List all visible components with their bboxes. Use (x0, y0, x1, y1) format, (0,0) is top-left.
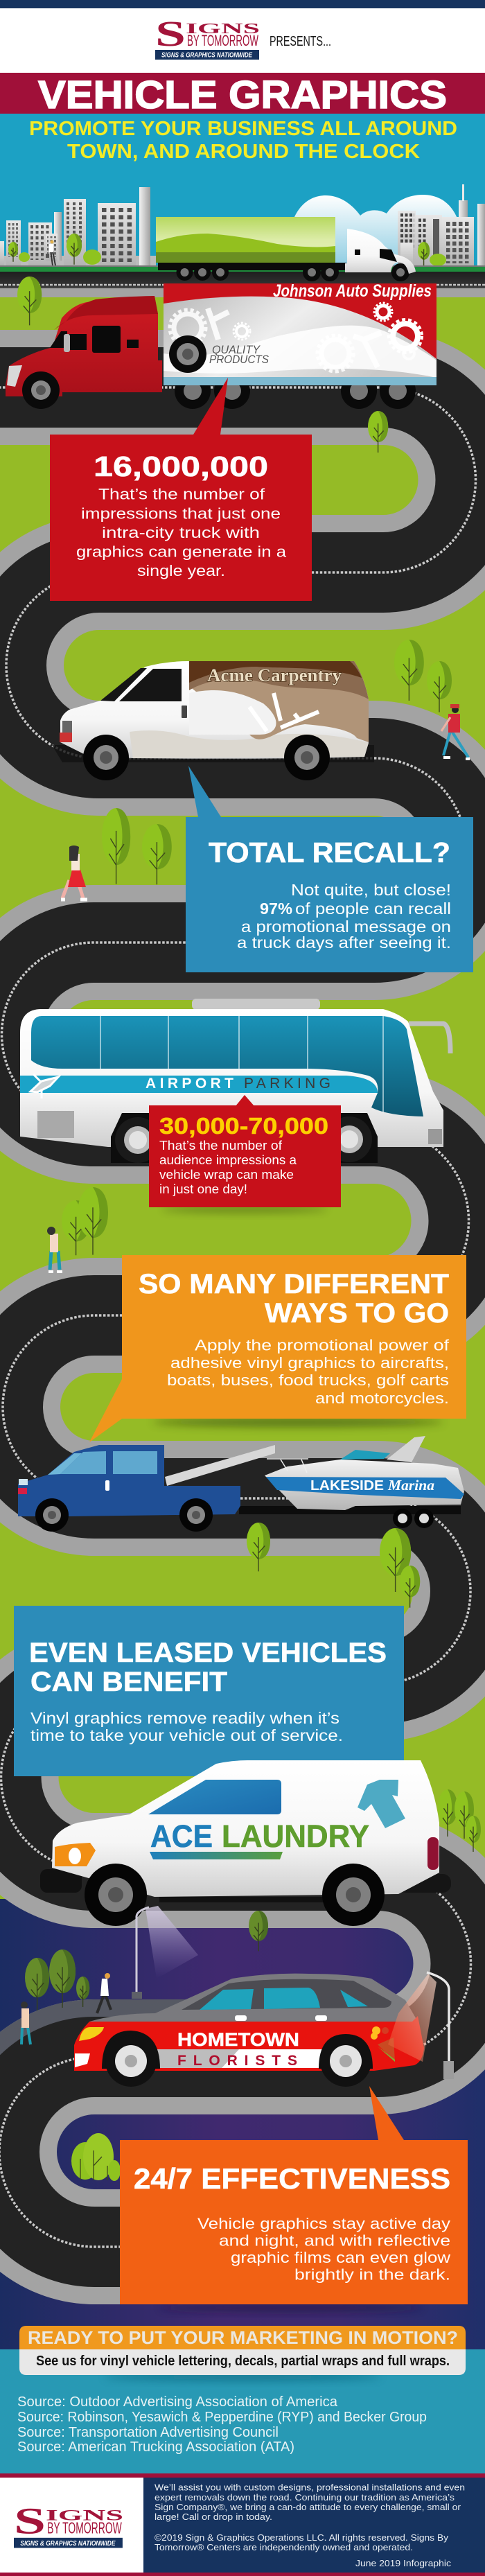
body: Vehicle graphics stay active day (197, 2215, 450, 2232)
t-shirt icon (358, 1780, 405, 1828)
winding road (0, 387, 475, 2247)
callout body (76, 485, 287, 579)
pedestrian with hat (441, 704, 470, 759)
street lamp far (427, 1972, 449, 2062)
red callout: 30,000-70,000 (149, 1095, 341, 1213)
body: time to take your vehicle out of service. (30, 1726, 343, 1744)
body: and night, and with reflective (219, 2232, 450, 2250)
car wheels (102, 2031, 373, 2087)
car body (74, 2016, 424, 2071)
footer text: We’ll assist you with custom designs, professional installations and even (155, 2482, 465, 2492)
pickup wheels (35, 1498, 213, 1532)
body: Vinyl graphics remove readily when it’s (30, 1709, 340, 1727)
logo: Signs By Tomorrow: IGNS (186, 20, 260, 37)
red callout: 16,000,000 (50, 378, 312, 601)
van body (60, 661, 369, 759)
footer logo: IGNS (46, 2507, 123, 2524)
van wrap (189, 661, 369, 742)
red semi truck (6, 281, 436, 409)
heading: WAYS TO GO (265, 1298, 449, 1329)
trees along the road (17, 277, 481, 1852)
car roof (89, 1974, 418, 2022)
body (30, 1709, 343, 1744)
red car: Hometown Florists: FLORISTS (177, 2053, 297, 2069)
presents label: PRESENTS... (270, 34, 331, 49)
van wheels (83, 735, 330, 780)
footer text: June 2019 Infographic (355, 2558, 452, 2568)
night trees (25, 1911, 268, 2010)
bus: Airport Parking (20, 999, 450, 1163)
city skyline left (0, 187, 156, 265)
van windows (100, 668, 182, 701)
trailer frame (239, 1506, 461, 1514)
woman in red skirt (61, 845, 87, 900)
street line and verge (0, 265, 485, 267)
grille (37, 1111, 74, 1138)
body: Apply the promotional power of (195, 1336, 450, 1354)
lights (55, 1843, 96, 1866)
bus lettering: AIRPORT (146, 1076, 233, 1092)
footer logo: BY TOMORROW (47, 2519, 122, 2537)
bouquet (378, 2038, 395, 2062)
night pedestrians (21, 1973, 111, 2044)
red car: Hometown Florists (74, 1972, 454, 2087)
trailer graphic: PRODUCTS (209, 353, 270, 366)
callout body: That’s the number of (98, 485, 265, 503)
tow arm (165, 1445, 275, 1486)
pickup windows (48, 1451, 157, 1475)
call to action heading: READY TO PUT YOUR MARKETING IN MOTION? (28, 2327, 458, 2348)
body: of people can recall (295, 900, 451, 918)
body: and motorcycles. (315, 1390, 449, 1407)
body (197, 2215, 450, 2283)
white van: Ace Laundry: LAUNDRY (222, 1819, 369, 1854)
upper truck wheels (176, 263, 409, 281)
body: Not quite, but close! (291, 881, 451, 899)
body: boats, buses, food trucks, golf carts (167, 1372, 449, 1389)
callout body: single year. (137, 562, 225, 579)
street trees in city (8, 234, 446, 266)
pickup body (18, 1445, 240, 1516)
van body (52, 1760, 439, 1897)
subtitle: TOWN, AND AROUND THE CLOCK (67, 141, 420, 163)
boat: LAKESIDE (310, 1478, 384, 1493)
green trailer (156, 217, 335, 263)
white cab (345, 229, 416, 274)
top navy bar (0, 0, 485, 8)
footer text: Sign Company®, we bring a can-do attitude to every challenge, small or (155, 2502, 461, 2512)
heading: 24/7 EFFECTIVENESS (134, 2162, 450, 2195)
body (159, 1139, 297, 1196)
body: vehicle wrap can make (159, 1168, 294, 1182)
car windows (200, 1988, 368, 2010)
big yellow number: 30,000-70,000 (159, 1113, 328, 1139)
van wrap: Acme Carpentry (207, 665, 342, 685)
truck wheels (175, 373, 416, 409)
truck cab (6, 296, 162, 409)
footer logo (14, 2500, 123, 2548)
city skyline right (398, 184, 485, 265)
trailer graphic (164, 281, 436, 385)
bus stripe (20, 1076, 378, 1093)
boat: Marina (387, 1477, 434, 1493)
bus body (20, 1009, 443, 1147)
trailer wheels (393, 1509, 434, 1528)
pickup truck towing boat (18, 1436, 464, 1532)
lower body wave (130, 730, 369, 758)
clouds (290, 195, 459, 265)
white van: Acme Carpentry (52, 661, 374, 780)
blue callout: leased vehicles (14, 1606, 404, 1776)
orange callout: so many ways (89, 1255, 466, 1442)
mirror (409, 1024, 450, 1053)
body: a promotional message on (241, 918, 451, 936)
trailer graphic: QUALITY (212, 343, 261, 356)
pedestrian in teal jeans (47, 1227, 62, 1272)
grass background (0, 272, 485, 1900)
boat (265, 1436, 464, 1510)
subtitle: PROMOTE YOUR BUSINESS ALL AROUND (29, 118, 457, 140)
plane icon (30, 1074, 58, 1098)
sources list: Source: American Trucking Association (ATA) (17, 2439, 294, 2455)
body: 97% (260, 900, 292, 918)
footer logo: SIGNS & GRAPHICS NATIONWIDE (20, 2540, 116, 2548)
subtitle (29, 118, 457, 163)
heading: EVEN LEASED VEHICLES (29, 1638, 387, 1668)
top road (0, 272, 485, 297)
bus windows (31, 1016, 423, 1116)
night background (0, 1899, 485, 2349)
blue callout: Total Recall (186, 766, 473, 972)
logo: Signs By Tomorrow: S (155, 15, 186, 54)
white van: Ace Laundry (40, 1760, 451, 1926)
car lettering: HOMETOWN (177, 2029, 299, 2050)
footer text: Tomorrow® Centers are independently owned and operated. (155, 2542, 413, 2552)
footer text: ©2019 Sign & Graphics Operations LLC. All rights reserved. Signs By (155, 2532, 449, 2543)
wheels (85, 1864, 385, 1926)
body: adhesive vinyl graphics to aircrafts, (170, 1354, 449, 1372)
body (237, 881, 451, 952)
footer logo: S (14, 2500, 46, 2542)
big number: 16,000,000 (94, 450, 268, 482)
side band (157, 2049, 323, 2068)
callout body: impressions that just one (81, 505, 281, 523)
body: brightly in the dark. (294, 2266, 450, 2283)
callout body: graphics can generate in a (76, 543, 287, 560)
call to action text: See us for vinyl vehicle lettering, decals, partial wraps and full wraps. (36, 2354, 450, 2369)
logo: Signs By Tomorrow: BY TOMORROW (187, 32, 258, 49)
sources list (17, 2394, 427, 2455)
bus: Airport Parking: PARKING (244, 1076, 330, 1092)
sources list: Source: Outdoor Advertising Association of America (17, 2394, 338, 2410)
street lamp with light cone (132, 1906, 198, 1999)
bus wheels (111, 1113, 378, 1163)
logo: Signs By Tomorrow (155, 15, 260, 60)
teal footer background (0, 2349, 485, 2474)
window (148, 1780, 281, 1814)
footer text: large! Call or drop in today. (155, 2512, 272, 2522)
white header band (0, 8, 485, 73)
heading (139, 1269, 449, 1329)
walker in city (46, 240, 55, 265)
orange callout: 24/7 effectiveness (120, 2086, 468, 2311)
heading: TOTAL RECALL? (209, 836, 450, 868)
sky background (0, 114, 485, 268)
footer text: expert removals down the road. Continuing our tradition as America’s (155, 2492, 455, 2503)
body: a truck days after seeing it. (237, 934, 451, 952)
body (167, 1336, 450, 1407)
footer (0, 2473, 485, 2576)
bush trees at night (71, 2133, 121, 2181)
trailer graphic: Johnson Auto Supplies (273, 281, 432, 301)
lamp light cone (388, 1974, 436, 2062)
heading: CAN BENEFIT (30, 1667, 227, 1697)
heading: SO MANY DIFFERENT (139, 1269, 449, 1299)
green and white truck (156, 217, 416, 281)
sources list: Source: Robinson, Yesawich & Pepperdine (RYP) and Becker Group (17, 2410, 427, 2425)
body: graphic films can even glow (231, 2249, 450, 2266)
body: audience impressions a (159, 1153, 297, 1167)
call to action panel (19, 2326, 466, 2381)
logo text: ACE (150, 1819, 213, 1854)
callout body: intra-city truck with (102, 524, 260, 541)
title band: VEHICLE GRAPHICS (38, 73, 447, 117)
body: in just one day! (159, 1182, 247, 1196)
heading (29, 1638, 387, 1697)
footer text (155, 2482, 465, 2568)
logo: Signs By Tomorrow: SIGNS & GRAPHICS NATIONWIDE (161, 51, 252, 60)
sources list: Source: Transportation Advertising Council (17, 2425, 279, 2440)
body: That’s the number of (159, 1139, 283, 1153)
